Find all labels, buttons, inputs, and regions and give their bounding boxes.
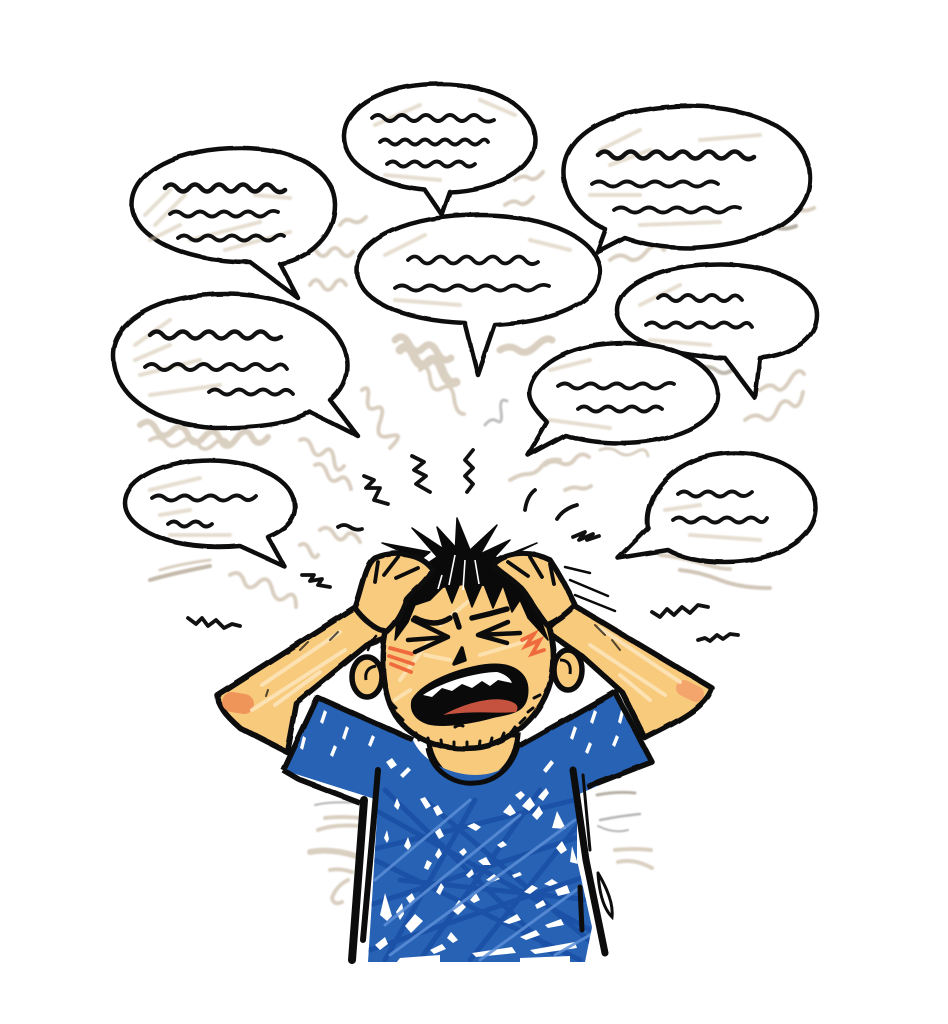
blush (389, 634, 544, 672)
bubble: middle left (113, 294, 358, 436)
nose (454, 648, 465, 664)
right ear (554, 650, 582, 690)
bubble: center right (528, 343, 718, 455)
left ear (352, 657, 382, 697)
face (383, 582, 553, 748)
bubble: center (357, 215, 600, 375)
bubble: top center (344, 84, 535, 215)
stubble (390, 695, 540, 749)
teeth (423, 672, 512, 697)
face highlights (395, 600, 530, 700)
left hand (355, 554, 433, 632)
hair highlights (438, 555, 479, 590)
bubble: middle right (617, 264, 817, 398)
left fingers (375, 557, 418, 582)
hair wisps (368, 567, 615, 650)
left arm (217, 606, 395, 752)
shirt collar and sleeve outline (283, 692, 652, 803)
bubble: upper left (132, 148, 335, 298)
right hand (493, 554, 575, 625)
bubble text squiggles (145, 115, 767, 526)
hair (382, 518, 548, 640)
right fingers (508, 557, 554, 584)
shirt white gaps (300, 710, 624, 964)
background: brown sketch squiggles (140, 172, 814, 903)
bubble: lower left (125, 460, 295, 566)
speech bubbles (113, 84, 817, 566)
tongue (443, 699, 518, 715)
bubble: lower right (618, 453, 816, 562)
figure: man (217, 518, 712, 964)
eyes (408, 609, 520, 652)
stress marks (188, 450, 738, 641)
elbow blush and arm highlights (232, 625, 696, 710)
shirt side lines (352, 770, 612, 960)
neck (428, 735, 518, 783)
right arm (545, 605, 712, 738)
bubble: top right (564, 106, 810, 252)
illustration: overwhelmed man surrounded by speech bubbles (110, 81, 820, 964)
shirt (283, 692, 652, 964)
bubble inner shading (135, 100, 760, 540)
mouth (412, 665, 527, 724)
